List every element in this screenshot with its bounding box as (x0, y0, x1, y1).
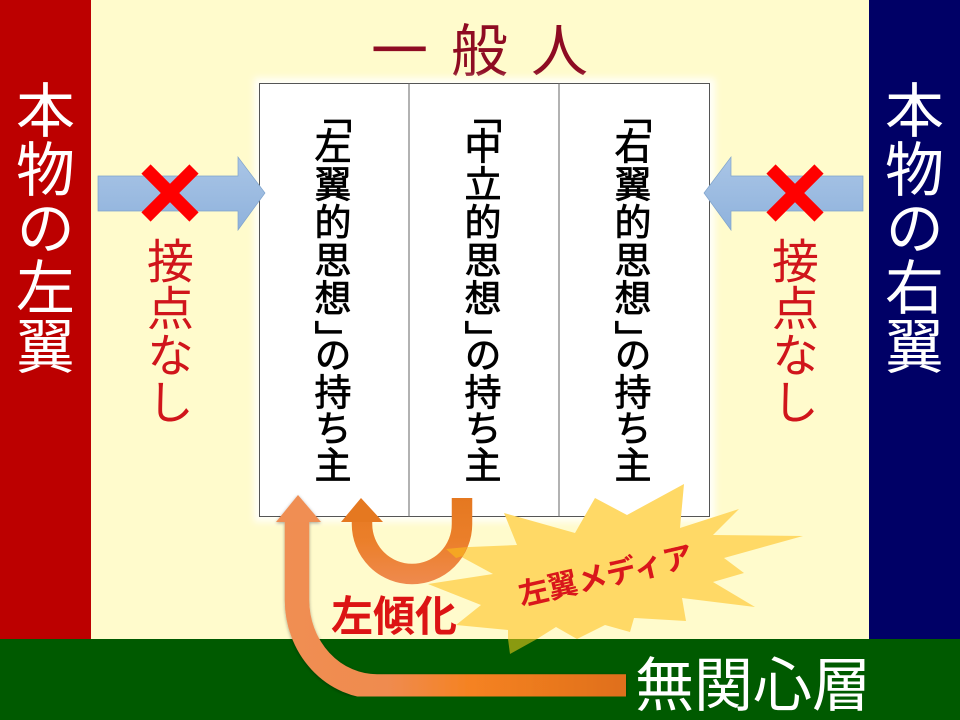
icon: right red cross (766, 164, 824, 222)
column text: centrist thought holders: 中立的思想 (456, 127, 510, 317)
label: no contact left: 接点なし (136, 237, 205, 425)
column text: left-wing thought holders: 「 (306, 96, 360, 133)
label: real right wing: 本物の右翼 (872, 80, 957, 375)
column text: right-wing thought holders: 右翼的思想 (606, 127, 660, 317)
table: three opinion columns (259, 83, 710, 517)
column text: centrist thought holders: 「 (456, 96, 510, 133)
column text: right-wing thought holders: の持ち主 (606, 336, 660, 483)
column text: left-wing thought holders (306, 96, 360, 483)
column text: left-wing thought holders: 左翼的思想 (306, 127, 360, 317)
column text: centrist thought holders (456, 96, 510, 483)
label: no contact right: 接点なし (761, 237, 830, 425)
label: left-wing media: 左翼メディア (513, 532, 697, 614)
arrow: right wing to general public (704, 156, 864, 231)
label: left shift: 左傾化 (331, 583, 457, 644)
column text: left-wing thought holders: 」 (306, 320, 360, 357)
panel: real left wing (0, 0, 91, 639)
column text: right-wing thought holders (606, 96, 660, 483)
panel: real right wing (869, 0, 960, 639)
column text: left-wing thought holders: の持ち主 (306, 336, 360, 483)
panel: apathetic layer band (0, 639, 960, 720)
column text: centrist thought holders: の持ち主 (456, 336, 510, 483)
icon: left red cross (142, 164, 198, 222)
label: real left wing: 本物の左翼 (3, 80, 88, 375)
column text: right-wing thought holders: 」 (606, 320, 660, 357)
arrow: left wing to general public (98, 156, 266, 231)
title: 一般人 (371, 6, 611, 88)
column text: centrist thought holders: 」 (456, 320, 510, 357)
column text: right-wing thought holders: 「 (606, 96, 660, 133)
